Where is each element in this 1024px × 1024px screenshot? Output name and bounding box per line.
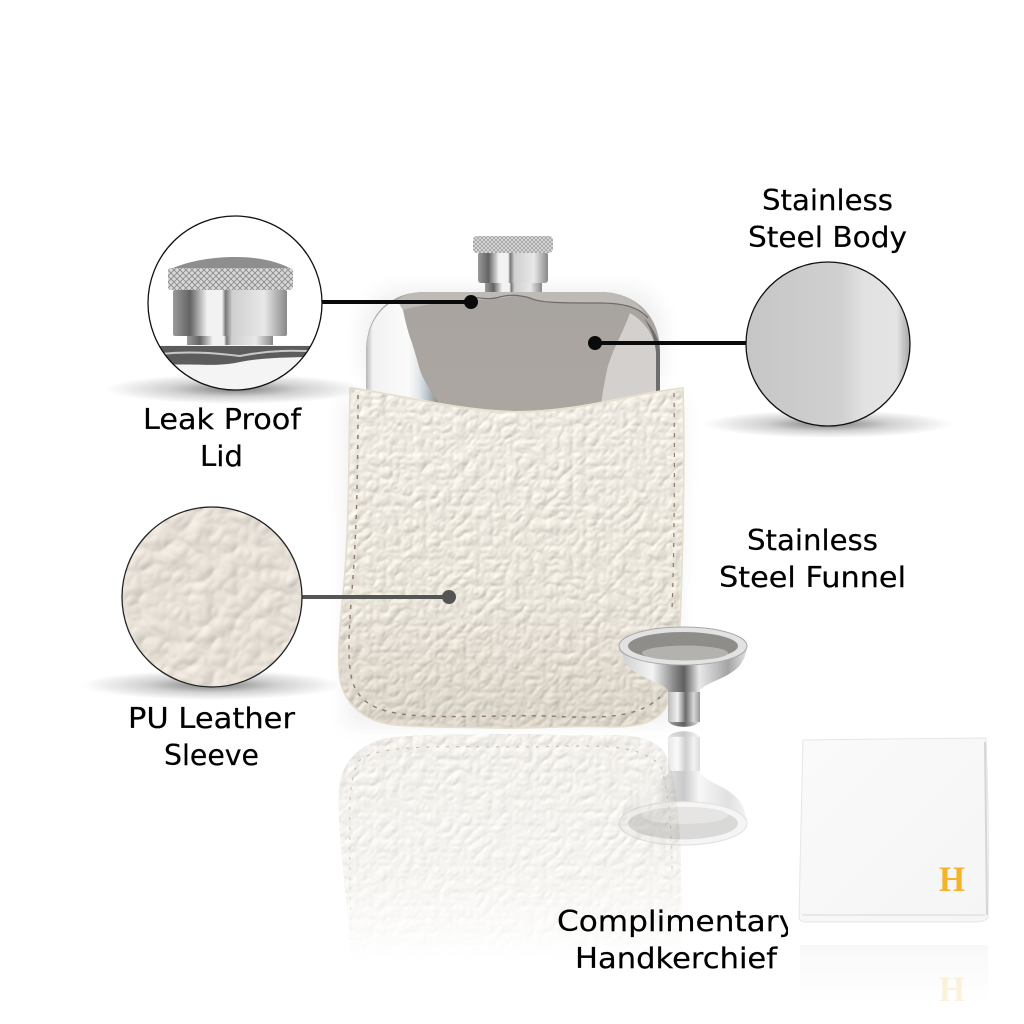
reflected cloth — [800, 945, 988, 1003]
white mask clipping the label — [788, 905, 802, 941]
leader: leak proof lid — [322, 295, 478, 309]
label: leak proof lid: Lid — [200, 440, 243, 473]
right edge shade — [985, 742, 987, 915]
label: leak proof lid — [143, 403, 302, 473]
sleeve body — [339, 388, 684, 728]
flask left highlight — [366, 300, 450, 418]
flask neck — [485, 281, 542, 294]
label: complimentary handkerchief — [557, 905, 797, 975]
label: PU leather sleeve: Sleeve — [164, 739, 259, 772]
flask soft shadow — [362, 288, 664, 398]
leather circle outline — [122, 507, 302, 687]
circle panel: PU leather — [82, 507, 342, 700]
circle panel: leak proof lid — [117, 215, 352, 402]
funnel reflection — [619, 731, 747, 845]
lid circle outline — [148, 216, 322, 390]
leather circle shadow — [82, 670, 342, 700]
circle panel: stainless steel body — [703, 262, 953, 438]
leather circle disc — [122, 507, 302, 687]
flask right highlight — [600, 313, 656, 418]
sleeve top lip — [350, 388, 683, 412]
steel circle disc — [746, 262, 910, 426]
flask shoulder crease — [470, 295, 648, 318]
flask cap knurled top — [473, 236, 553, 253]
label: leak proof lid: Leak Proof — [143, 403, 302, 436]
label: stainless steel body — [748, 184, 907, 254]
flask top band — [397, 292, 648, 318]
label: PU leather sleeve — [128, 702, 295, 772]
label: complimentary handkerchief: Complimentary — [557, 905, 797, 938]
label: stainless steel funnel — [719, 524, 906, 594]
label: stainless steel funnel: Steel Funnel — [719, 561, 906, 594]
label: complimentary handkerchief: Handkerchief — [575, 942, 778, 975]
label: stainless steel body: Stainless — [762, 184, 893, 217]
flask right edge — [644, 318, 660, 418]
sleeve edge — [339, 388, 684, 728]
sleeve right stitching — [672, 393, 674, 610]
lid circle background — [148, 216, 322, 390]
leather sleeve — [339, 388, 684, 728]
flask steel body — [366, 292, 660, 418]
reflected stitching — [350, 746, 672, 960]
steel circle shadow — [703, 410, 953, 438]
handkerchief reflection — [800, 945, 988, 1009]
lid detail image — [160, 257, 310, 389]
sleeve stitching — [349, 395, 660, 717]
reflected sleeve body — [339, 734, 682, 969]
embroidered monogram: H — [939, 859, 965, 899]
stainless steel funnel — [619, 627, 747, 727]
flask cap collar — [478, 252, 548, 283]
label: PU leather sleeve: PU Leather — [128, 702, 295, 735]
folded cloth — [799, 738, 988, 922]
lid circle shadow — [105, 374, 365, 404]
leader: steel body — [588, 336, 746, 350]
sleeve soft shadow — [342, 400, 685, 728]
sleeve reflection — [325, 730, 700, 992]
label: stainless steel funnel: Stainless — [747, 524, 878, 557]
handkerchief — [799, 738, 988, 922]
reflected monogram: H — [939, 969, 965, 1009]
leader: leather sleeve — [302, 590, 456, 604]
reflection fade overlay — [325, 730, 700, 992]
label: stainless steel body: Steel Body — [748, 221, 907, 254]
folded hem — [802, 914, 985, 916]
flask — [366, 236, 660, 418]
